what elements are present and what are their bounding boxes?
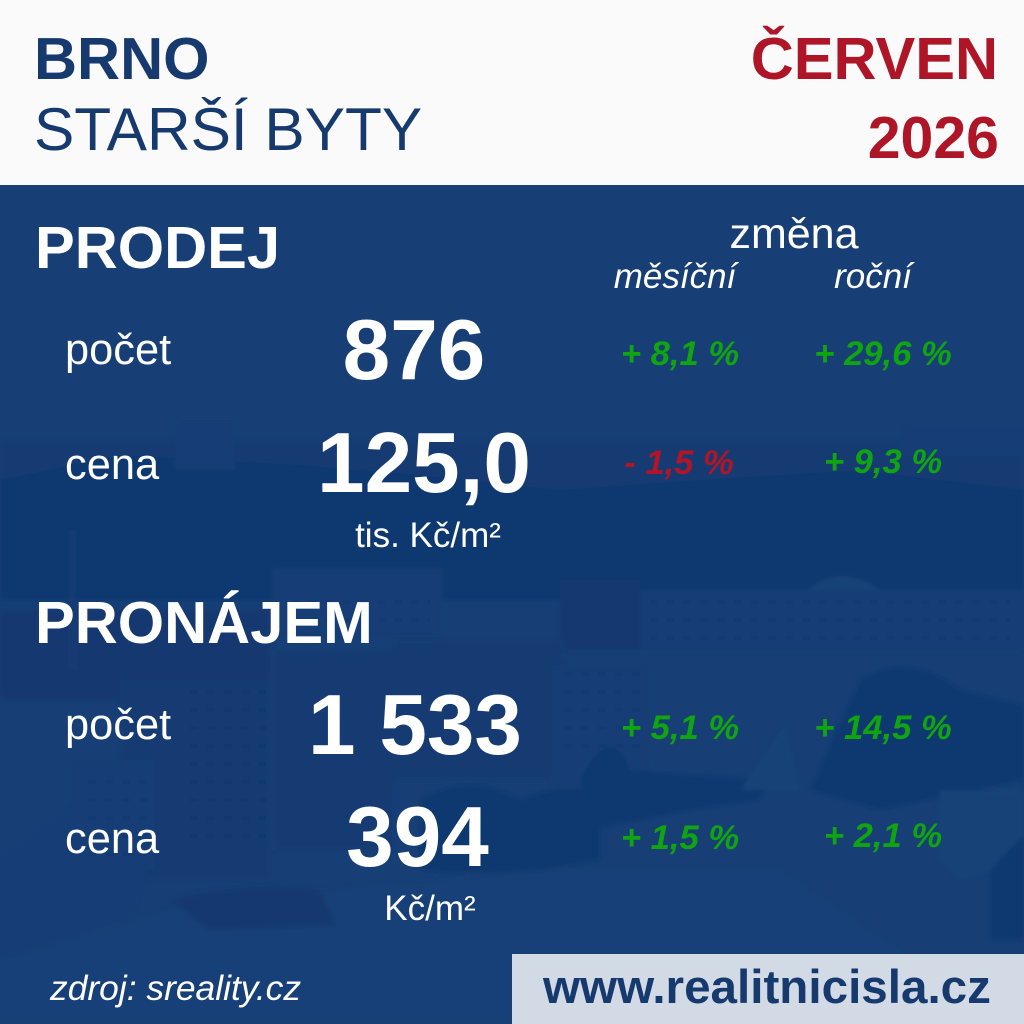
- change: prodej počet roční: + 29,6 %: [814, 335, 952, 373]
- change: pronájem cena roční: + 2,1 %: [824, 817, 942, 855]
- unit: Kč/m²: Kč/m²: [384, 889, 476, 928]
- heading: PRONÁJEM: PRONÁJEM: [35, 589, 373, 656]
- month: ČERVEN: [751, 25, 998, 92]
- source: zdroj: sreality.cz: [49, 968, 301, 1008]
- year: 2026: [868, 105, 999, 171]
- label: pronájem počet: počet: [65, 701, 171, 749]
- change: pronájem počet měsíční: + 5,1 %: [621, 709, 739, 747]
- label: prodej počet: počet: [65, 326, 171, 374]
- value: prodej počet: 876: [343, 303, 485, 398]
- column label: roční: roční: [834, 257, 915, 296]
- value: pronájem počet: 1 533: [308, 678, 522, 773]
- unit: tis. Kč/m²: tis. Kč/m²: [355, 516, 501, 555]
- website box: www.realitnicisla.cz: [542, 961, 991, 1014]
- title: BRNO: BRNO: [34, 25, 209, 92]
- panel: header band: [0, 0, 1024, 185]
- change: prodej počet měsíční: + 8,1 %: [621, 335, 739, 373]
- label: prodej cena: cena: [65, 441, 160, 489]
- change: pronájem cena měsíční: + 1,5 %: [621, 819, 739, 857]
- value: prodej cena: 125,0: [317, 416, 531, 511]
- heading: změna: změna: [729, 210, 859, 258]
- website box: [512, 954, 1024, 1024]
- change: pronájem počet roční: + 14,5 %: [814, 709, 952, 747]
- subtitle: STARŠÍ BYTY: STARŠÍ BYTY: [34, 95, 422, 163]
- change: prodej cena roční: + 9,3 %: [824, 443, 942, 481]
- column label: měsíční: měsíční: [614, 257, 740, 296]
- heading: PRODEJ: PRODEJ: [35, 214, 280, 281]
- label: pronájem cena: cena: [65, 815, 160, 863]
- value: pronájem cena: 394: [346, 790, 489, 885]
- change: prodej cena měsíční: - 1,5 %: [624, 444, 734, 482]
